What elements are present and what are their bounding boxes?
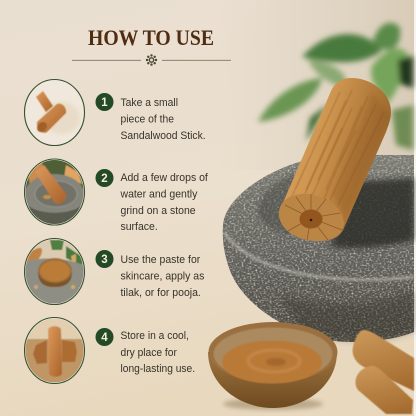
step 1 badge: 1	[101, 97, 108, 109]
step 4 text: dry place for	[120, 347, 177, 359]
step 4	[24, 317, 195, 385]
icon: flower	[146, 54, 157, 66]
step 2 text: grind on a stone	[120, 205, 196, 217]
step 1 text: Take a small	[120, 97, 178, 109]
step 3 text: tilak, or for pooja.	[120, 287, 201, 299]
sandalwood stick	[279, 78, 391, 241]
step 3 image	[24, 238, 85, 305]
step 1 text: Sandalwood Stick.	[120, 130, 206, 142]
step 1 text	[120, 97, 206, 142]
step 2	[24, 158, 209, 233]
step 2 badge: 2	[101, 173, 108, 185]
small wood sticks	[353, 330, 414, 414]
mortar inner basin	[330, 178, 414, 248]
mortar stone	[223, 155, 414, 342]
step 2 text	[120, 172, 209, 233]
step 2 badge	[96, 169, 114, 187]
mortar rim highlight	[224, 232, 414, 280]
step 4 text: Store in a cool,	[120, 330, 189, 342]
step 2 text: Add a few drops of	[120, 172, 209, 184]
lower shadow	[280, 290, 414, 339]
step 3	[24, 238, 205, 305]
step 3 text: skincare, apply as	[120, 270, 205, 283]
step 2 text: water and gently	[120, 188, 198, 201]
title divider	[72, 54, 231, 66]
step 1 text: piece of the	[120, 113, 174, 126]
step 4 text	[120, 330, 195, 375]
step 3 badge	[96, 250, 114, 268]
step 4 text: long-lasting use.	[120, 363, 195, 375]
title: HOW TO USE	[88, 25, 214, 50]
step 4 image	[24, 317, 85, 385]
bowl of paste	[208, 322, 338, 410]
step 1	[24, 80, 206, 146]
step 2 image	[24, 158, 86, 226]
stick end grain	[279, 194, 344, 241]
sandal paste	[222, 340, 322, 384]
step 3 text: Use the paste for	[120, 254, 201, 266]
step 2 text: surface.	[120, 221, 158, 233]
step 4 badge: 4	[101, 332, 108, 344]
step 4 badge	[96, 328, 114, 346]
blurred green leaves	[258, 23, 413, 150]
step 3 text	[120, 254, 205, 299]
step 1 image	[24, 80, 84, 146]
step 1 badge	[96, 93, 114, 111]
step 3 badge: 3	[101, 254, 108, 266]
